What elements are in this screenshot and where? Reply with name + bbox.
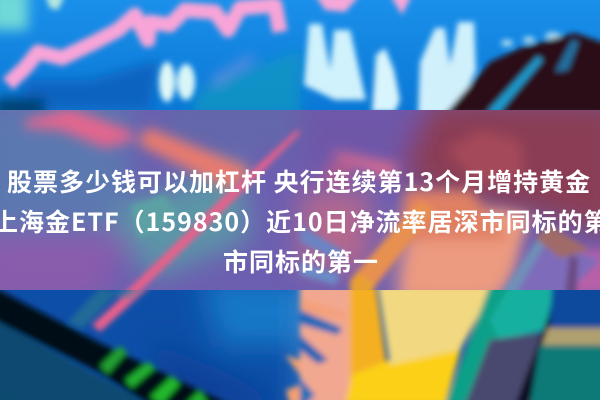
title line 1: 股票多少钱可以加杠杆 央行连续第13个月增持黄金 [7,163,591,199]
title [0,163,600,279]
title line 2: 上海金ETF（159830）近10日净流率居深市同标的第 [0,203,600,239]
title line 3: 市同标的第一 [223,243,379,279]
